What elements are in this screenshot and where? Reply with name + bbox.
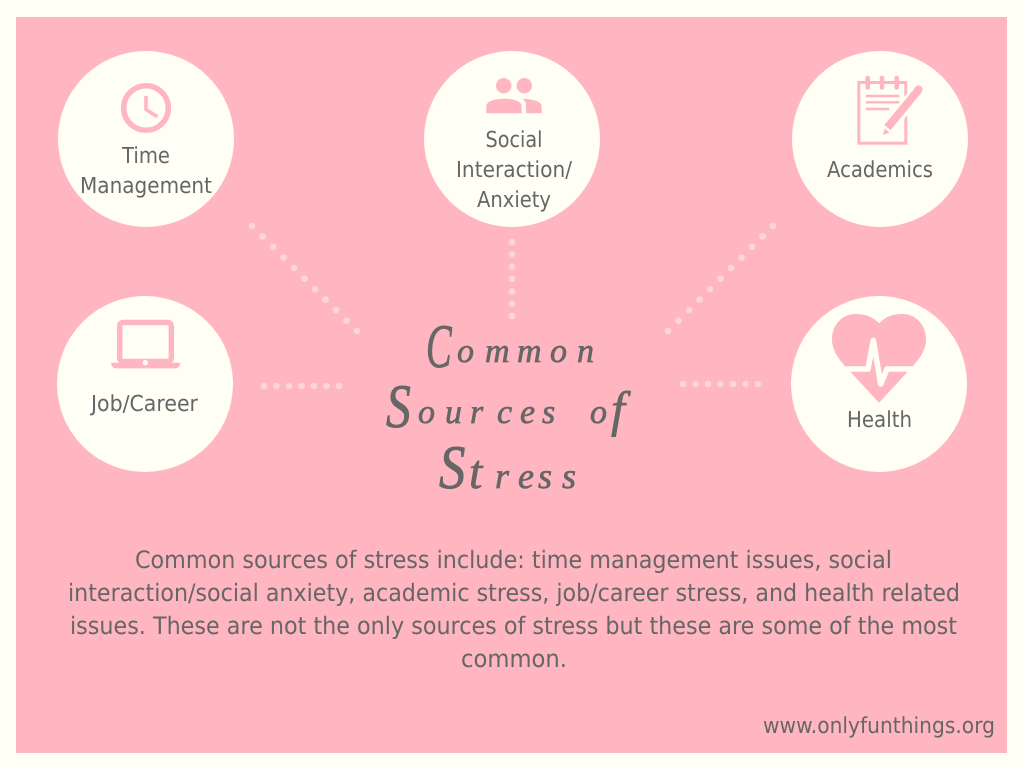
node: social interaction (424, 51, 600, 227)
label: social interaction (456, 128, 573, 213)
description text: Common sources of stress include: time management issues, social (135, 546, 892, 574)
description text: common. (461, 645, 567, 673)
title: ourceso (418, 394, 607, 431)
icon: clock (124, 86, 168, 130)
dotted connector: time management (252, 226, 358, 332)
label: job and career: Job/Career (89, 392, 199, 417)
title (386, 313, 631, 502)
description text: issues. These are not the only sources of stress but these are some of the most (70, 612, 957, 640)
node: time management (58, 51, 234, 227)
icon: people (486, 78, 542, 113)
label: social interaction: Social (486, 128, 542, 153)
description text: interaction/social anxiety, academic stress, job/career stress, and health related (68, 579, 960, 607)
node: job and career (57, 296, 233, 472)
dotted connector: academics (667, 226, 773, 332)
title: ommon (457, 333, 594, 370)
label: time management: Time (121, 144, 170, 169)
label: health: Health (847, 408, 912, 433)
title: C (426, 313, 452, 381)
icon: notepad and pencil (859, 78, 922, 143)
dotted connector: health (683, 381, 759, 387)
node: health (791, 296, 967, 472)
node: academics (792, 51, 968, 227)
title: ress (495, 456, 576, 496)
icon: laptop (111, 322, 180, 368)
dotted connector: social interaction (509, 242, 515, 317)
label: academics: Academics (827, 158, 933, 183)
title: f (611, 381, 631, 437)
dotted connector: job and career (264, 383, 340, 389)
title: S (439, 434, 465, 502)
label: time management (80, 144, 212, 199)
label: social interaction: Interaction/ (456, 158, 573, 183)
title: S (386, 373, 411, 441)
icon: heart with pulse (832, 314, 926, 403)
label: social interaction: Anxiety (477, 188, 551, 213)
website credit: www.onlyfunthings.org (763, 714, 995, 739)
label: time management: Management (80, 174, 212, 199)
title: t (469, 446, 484, 499)
description text (68, 546, 960, 673)
